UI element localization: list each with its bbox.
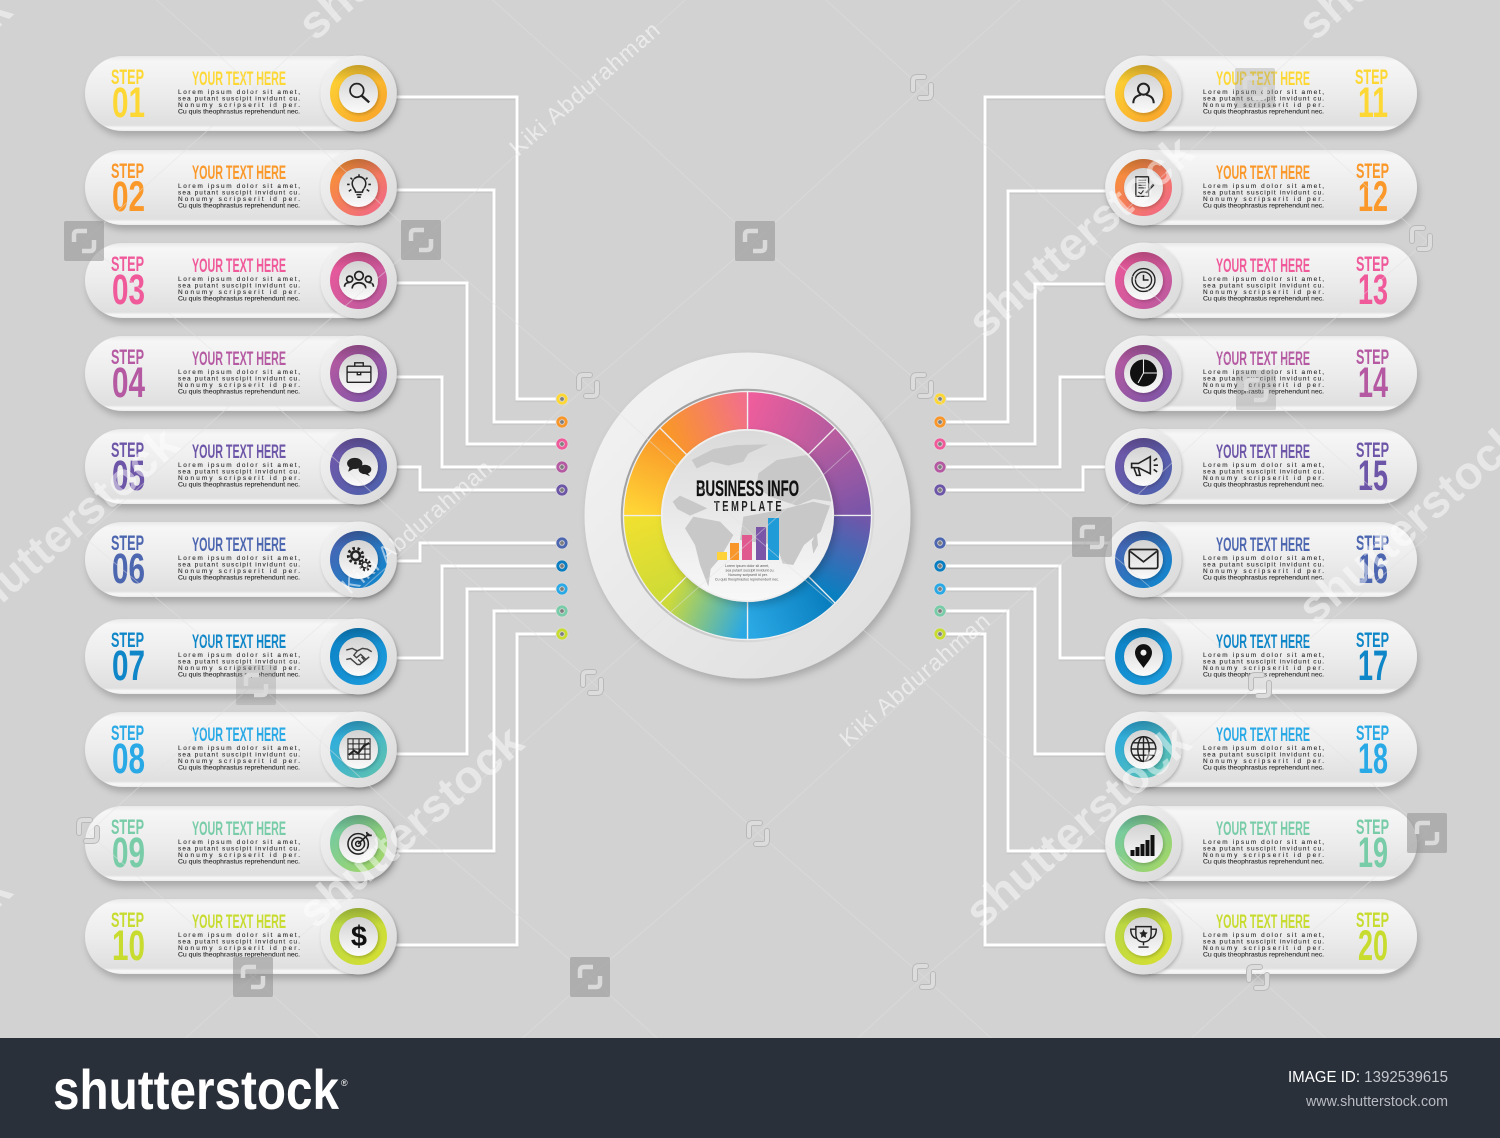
watermark: shutterstock text: shutterstock — [957, 124, 1203, 348]
step 01 body text: sea putant suscipit invidunt cu. — [178, 96, 300, 102]
central hub — [584, 352, 910, 678]
step 06 body text: sea putant suscipit invidunt cu. — [178, 562, 300, 568]
step 08 body text: Cu quis theophrastus reprehendunt nec. — [178, 764, 300, 772]
step 13 label: 13 — [1358, 266, 1388, 314]
step 10 card — [85, 898, 397, 974]
step 07 body text: Lorem ipsum dolor sit amet, — [178, 652, 300, 659]
icon: rising bars — [1130, 835, 1154, 856]
icon: megaphone — [1132, 457, 1158, 475]
icon: trophy — [1131, 927, 1156, 947]
step 17 label: STEP — [1356, 629, 1389, 652]
step 20 label — [1216, 909, 1389, 970]
step 08 label — [111, 722, 286, 783]
step 05 card — [85, 428, 397, 504]
step 14 body text — [1203, 369, 1324, 396]
step 05 label — [111, 439, 286, 500]
step 06 body text: Nonumy scripserit id per. — [178, 568, 300, 575]
watermark: author credit — [336, 16, 995, 752]
step 06 body text: Lorem ipsum dolor sit amet, — [178, 555, 300, 562]
step 20 body text — [1203, 932, 1324, 958]
step 13 body text: Cu quis theophrastus reprehendunt nec. — [1203, 296, 1324, 302]
step 17 body text: Nonumy scripserit id per. — [1203, 665, 1324, 672]
step 04 body text: Cu quis theophrastus reprehendunt nec. — [178, 388, 300, 396]
step 18 label — [1216, 722, 1389, 783]
step 11 body text: Cu quis theophrastus reprehendunt nec. — [1203, 108, 1324, 116]
step 18 body text: Lorem ipsum dolor sit amet, — [1203, 745, 1324, 752]
world map — [673, 444, 832, 587]
icon: envelope — [1129, 550, 1158, 568]
step 14 label: STEP — [1356, 346, 1389, 369]
step 17 body text — [1203, 652, 1324, 678]
step 02 label: STEP — [111, 160, 144, 183]
step 02 body text: sea putant suscipit invidunt cu. — [178, 190, 300, 196]
connector dots: right — [934, 393, 946, 640]
step 17 card — [1105, 618, 1417, 694]
step 12 body text: Cu quis theophrastus reprehendunt nec. — [1203, 202, 1324, 210]
hub inner disc — [662, 430, 833, 601]
watermark: author credit: Kiki Abdurahman — [834, 607, 995, 752]
step 02 body text: Cu quis theophrastus reprehendunt nec. — [178, 202, 300, 210]
step 09 card — [85, 806, 397, 882]
step 15 card — [1105, 428, 1417, 504]
step 15 label: STEP — [1356, 439, 1389, 462]
icon: map pin — [1135, 644, 1152, 668]
step 07 label: YOUR TEXT HERE — [192, 632, 286, 653]
step 19 body text — [1203, 839, 1324, 866]
step 15 label — [1216, 439, 1389, 500]
step 05 body text: Lorem ipsum dolor sit amet, — [178, 462, 300, 469]
step 12 label: STEP — [1356, 160, 1389, 183]
bar chart — [717, 518, 779, 560]
footer bar — [0, 1038, 1500, 1138]
step 14 label: YOUR TEXT HERE — [1216, 349, 1310, 370]
step 12 label — [1216, 160, 1389, 221]
hub recess edge — [622, 390, 873, 641]
step 10 label: YOUR TEXT HERE — [192, 912, 286, 933]
step 02 label — [111, 160, 286, 221]
step 16 body text: Lorem ipsum dolor sit amet, — [1203, 555, 1324, 562]
step 06 body text — [178, 555, 300, 582]
step 18 body text — [1203, 745, 1324, 772]
step 10 body text: Cu quis theophrastus reprehendunt nec. — [178, 952, 300, 958]
step 03 label — [111, 253, 286, 314]
icon: handshake — [346, 648, 372, 664]
step 17 body text: Lorem ipsum dolor sit amet, — [1203, 652, 1324, 659]
step 11 label: YOUR TEXT HERE — [1216, 69, 1310, 90]
step 14 body text: Cu quis theophrastus reprehendunt nec. — [1203, 388, 1324, 396]
step 03 label: YOUR TEXT HERE — [192, 256, 286, 277]
step 09 body text: Cu quis theophrastus reprehendunt nec. — [178, 858, 300, 866]
step 12 card — [1105, 150, 1417, 226]
step 09 body text — [178, 839, 300, 866]
step 12 body text: Nonumy scripserit id per. — [1203, 196, 1324, 203]
step 17 body text: sea putant suscipit invidunt cu. — [1203, 658, 1324, 666]
step 19 label — [1216, 816, 1389, 877]
step 01 body text: Lorem ipsum dolor sit amet, — [178, 89, 300, 96]
step 15 body text: Nonumy scripserit id per. — [1203, 475, 1324, 482]
step 01 label: STEP — [111, 66, 144, 89]
watermark: grey logo squares — [64, 68, 1447, 997]
step 12 body text — [1203, 183, 1324, 210]
step 19 label: YOUR TEXT HERE — [1216, 819, 1310, 840]
step 14 body text: sea putant suscipit invidunt cu. — [1203, 376, 1324, 382]
step 08 body text: sea putant suscipit invidunt cu. — [178, 752, 300, 758]
step 20 body text: Cu quis theophrastus reprehendunt nec. — [1203, 952, 1324, 958]
step 11 label: STEP — [1355, 66, 1388, 89]
step 20 label: 20 — [1358, 922, 1388, 970]
step 13 body text: sea putant suscipit invidunt cu. — [1203, 282, 1324, 290]
step 02 body text: Lorem ipsum dolor sit amet, — [178, 183, 300, 190]
step 13 body text: Nonumy scripserit id per. — [1203, 289, 1324, 296]
step 04 label: YOUR TEXT HERE — [192, 349, 286, 370]
step 20 card — [1105, 898, 1417, 974]
step 20 label: STEP — [1356, 909, 1389, 932]
hub small text: Lorem ipsum dolor sit amet, — [725, 564, 769, 568]
icon: briefcase — [347, 363, 371, 382]
hub small text: Nonumy scripserit id per. — [728, 573, 768, 577]
icon: clock — [1132, 269, 1155, 291]
step 15 body text: sea putant suscipit invidunt cu. — [1203, 468, 1324, 476]
step 03 card — [85, 242, 397, 318]
step 08 card — [85, 712, 397, 788]
icon: pie chart — [1130, 360, 1157, 386]
icon: magnifier — [350, 84, 369, 102]
step 08 label: 08 — [112, 735, 145, 783]
step 03 body text: sea putant suscipit invidunt cu. — [178, 282, 300, 290]
step 15 body text: Cu quis theophrastus reprehendunt nec. — [1203, 482, 1324, 488]
step 18 body text: Nonumy scripserit id per. — [1203, 758, 1324, 765]
step 11 card — [1105, 56, 1417, 132]
icon: gears — [348, 548, 370, 570]
step 04 body text: Lorem ipsum dolor sit amet, — [178, 369, 300, 376]
step 16 body text: Nonumy scripserit id per. — [1203, 568, 1324, 575]
step 10 body text: Lorem ipsum dolor sit amet, — [178, 932, 300, 939]
step 08 body text — [178, 745, 300, 772]
step 15 label: YOUR TEXT HERE — [1216, 442, 1310, 463]
step 09 label — [111, 816, 286, 877]
step 17 label — [1216, 629, 1389, 690]
step 06 card — [85, 522, 397, 598]
hub small text: Cu quis theophrastus reprehendunt nec. — [715, 578, 779, 582]
step 20 body text: Nonumy scripserit id per. — [1203, 945, 1324, 952]
step 11 body text — [1203, 89, 1324, 116]
step 20 body text: Lorem ipsum dolor sit amet, — [1203, 932, 1324, 939]
step 09 body text: Lorem ipsum dolor sit amet, — [178, 839, 300, 846]
connector dots: left — [556, 393, 568, 640]
watermark: logo marks — [79, 77, 1430, 988]
step 02 label: YOUR TEXT HERE — [192, 163, 286, 184]
step 11 body text: sea putant suscipit invidunt cu. — [1203, 96, 1324, 102]
step 11 body text: Nonumy scripserit id per. — [1203, 102, 1324, 109]
step 16 label: STEP — [1356, 532, 1389, 555]
icon: globe — [1131, 737, 1156, 761]
step 14 label — [1216, 346, 1389, 407]
step 14 body text: Lorem ipsum dolor sit amet, — [1203, 369, 1324, 376]
step 16 body text — [1203, 555, 1324, 582]
step 05 label: STEP — [111, 439, 144, 462]
step 20 label: YOUR TEXT HERE — [1216, 912, 1310, 933]
step 07 body text: Nonumy scripserit id per. — [178, 665, 300, 672]
step 13 card — [1105, 242, 1417, 318]
step 01 label: 01 — [112, 79, 145, 127]
step 01 body text: Cu quis theophrastus reprehendunt nec. — [178, 108, 300, 116]
watermark: author credit: Kiki Abdurahman — [336, 454, 497, 599]
step 11 label: 11 — [1358, 79, 1388, 127]
step 08 body text: Lorem ipsum dolor sit amet, — [178, 745, 300, 752]
step 12 label: YOUR TEXT HERE — [1216, 163, 1310, 184]
step 05 label: YOUR TEXT HERE — [192, 442, 286, 463]
step 07 body text: Cu quis theophrastus reprehendunt nec. — [178, 672, 300, 678]
step 03 body text: Cu quis theophrastus reprehendunt nec. — [178, 296, 300, 302]
step 04 body text — [178, 369, 300, 396]
step 09 body text: sea putant suscipit invidunt cu. — [178, 846, 300, 852]
step 19 label: 19 — [1358, 829, 1388, 877]
step 01 body text: Nonumy scripserit id per. — [178, 102, 300, 109]
step 10 label — [111, 909, 286, 970]
step 03 body text: Lorem ipsum dolor sit amet, — [178, 276, 300, 283]
icon: document with pen — [1136, 177, 1154, 196]
watermark: shutterstock text: shutterstock — [287, 714, 533, 938]
step 20 body text: sea putant suscipit invidunt cu. — [1203, 938, 1324, 946]
step 04 label: 04 — [112, 359, 145, 407]
icon: user — [1133, 84, 1154, 103]
step 03 body text — [178, 276, 300, 302]
step 01 body text — [178, 89, 300, 116]
step 19 body text: Lorem ipsum dolor sit amet, — [1203, 839, 1324, 846]
step 19 card — [1105, 806, 1417, 882]
step 07 label — [111, 629, 286, 690]
step 06 label: STEP — [111, 532, 144, 555]
step 10 label: 10 — [112, 922, 145, 970]
step 16 label — [1216, 532, 1389, 593]
hub subtitle: TEMPLATE — [714, 498, 784, 515]
step 10 body text — [178, 932, 300, 958]
step 10 body text: Nonumy scripserit id per. — [178, 945, 300, 952]
step 12 label: 12 — [1358, 173, 1388, 221]
step 14 label: 14 — [1358, 359, 1388, 407]
icon: target — [348, 832, 372, 854]
watermark: shutterstock text: shutterstock — [954, 714, 1200, 938]
connector lines: left — [392, 97, 562, 945]
step 19 body text: sea putant suscipit invidunt cu. — [1203, 846, 1324, 852]
step 07 card — [85, 618, 397, 694]
step 14 card — [1105, 336, 1417, 412]
step 13 body text: Lorem ipsum dolor sit amet, — [1203, 276, 1324, 283]
step 07 label: 07 — [112, 642, 145, 690]
step 07 body text — [178, 652, 300, 678]
step 09 label: STEP — [111, 816, 144, 839]
step 11 label — [1216, 66, 1388, 127]
step 11 body text: Lorem ipsum dolor sit amet, — [1203, 89, 1324, 96]
step 16 body text: sea putant suscipit invidunt cu. — [1203, 562, 1324, 568]
step 19 body text: Cu quis theophrastus reprehendunt nec. — [1203, 858, 1324, 866]
step 12 body text: Lorem ipsum dolor sit amet, — [1203, 183, 1324, 190]
step 01 card — [85, 56, 397, 132]
step 04 body text: Nonumy scripserit id per. — [178, 382, 300, 389]
step 16 body text: Cu quis theophrastus reprehendunt nec. — [1203, 574, 1324, 582]
step 02 label: 02 — [112, 173, 145, 221]
step 06 label: YOUR TEXT HERE — [192, 535, 286, 556]
step 07 body text: sea putant suscipit invidunt cu. — [178, 658, 300, 666]
step 18 body text: Cu quis theophrastus reprehendunt nec. — [1203, 764, 1324, 772]
watermark: author credit: Kiki Abdurahman — [504, 16, 665, 161]
icon: dollar: $ — [351, 921, 367, 953]
step 04 card — [85, 336, 397, 412]
icon: chart grid — [348, 739, 370, 759]
step 06 label — [111, 532, 286, 593]
step 13 body text — [1203, 276, 1324, 302]
step 16 card — [1105, 522, 1417, 598]
step 06 label: 06 — [112, 545, 145, 593]
step 05 body text — [178, 462, 300, 488]
step 15 body text: Lorem ipsum dolor sit amet, — [1203, 462, 1324, 469]
hub small text — [715, 564, 779, 582]
step 01 label: YOUR TEXT HERE — [192, 69, 286, 90]
step 19 body text: Nonumy scripserit id per. — [1203, 852, 1324, 859]
step 17 label: YOUR TEXT HERE — [1216, 632, 1310, 653]
step 16 label: 16 — [1358, 545, 1388, 593]
step 14 body text: Nonumy scripserit id per. — [1203, 382, 1324, 389]
step 03 label: 03 — [112, 266, 145, 314]
step 04 body text: sea putant suscipit invidunt cu. — [178, 376, 300, 382]
step 18 label: STEP — [1356, 722, 1389, 745]
step 18 label: YOUR TEXT HERE — [1216, 725, 1310, 746]
icon: chat bubbles — [347, 458, 371, 476]
icon: team — [345, 272, 373, 288]
step 15 label: 15 — [1358, 452, 1388, 500]
footer registered mark: ® — [341, 1078, 348, 1088]
step 12 body text: sea putant suscipit invidunt cu. — [1203, 190, 1324, 196]
step 04 label: STEP — [111, 346, 144, 369]
step 03 body text: Nonumy scripserit id per. — [178, 289, 300, 296]
step 18 label: 18 — [1358, 735, 1388, 783]
step 17 body text: Cu quis theophrastus reprehendunt nec. — [1203, 672, 1324, 678]
step 04 label — [111, 346, 286, 407]
step 02 card — [85, 150, 397, 226]
step 05 body text: Cu quis theophrastus reprehendunt nec. — [178, 482, 300, 488]
step 13 label: YOUR TEXT HERE — [1216, 256, 1310, 277]
step 15 body text — [1203, 462, 1324, 488]
step 07 label: STEP — [111, 629, 144, 652]
step 09 label: 09 — [112, 829, 145, 877]
step 05 body text: Nonumy scripserit id per. — [178, 475, 300, 482]
step 17 label: 17 — [1358, 642, 1388, 690]
step 01 label — [111, 66, 286, 127]
connector lines: right — [940, 97, 1110, 945]
step 09 body text: Nonumy scripserit id per. — [178, 852, 300, 859]
step 13 label: STEP — [1356, 253, 1389, 276]
step 02 body text — [178, 183, 300, 210]
footer logo: shutterstock — [53, 1058, 340, 1121]
step 02 body text: Nonumy scripserit id per. — [178, 196, 300, 203]
step 10 label: STEP — [111, 909, 144, 932]
step 05 label: 05 — [112, 452, 145, 500]
step 08 label: YOUR TEXT HERE — [192, 725, 286, 746]
step 08 body text: Nonumy scripserit id per. — [178, 758, 300, 765]
colour ring segments — [624, 392, 872, 640]
footer image id: IMAGE ID: 1392539615 — [1288, 1069, 1448, 1086]
step 19 label: STEP — [1356, 816, 1389, 839]
step 18 card — [1105, 712, 1417, 788]
step 05 body text: sea putant suscipit invidunt cu. — [178, 468, 300, 476]
hub title: BUSINESS INFO — [696, 476, 799, 501]
step 10 body text: sea putant suscipit invidunt cu. — [178, 938, 300, 946]
step 03 label: STEP — [111, 253, 144, 276]
hub small text: sea putant suscipit invidunt cu. — [726, 568, 774, 572]
step 06 body text: Cu quis theophrastus reprehendunt nec. — [178, 574, 300, 582]
footer url: www.shutterstock.com — [1305, 1094, 1448, 1110]
step 08 label: STEP — [111, 722, 144, 745]
step 18 body text: sea putant suscipit invidunt cu. — [1203, 752, 1324, 758]
hub outer plate — [584, 352, 910, 678]
step 09 label: YOUR TEXT HERE — [192, 819, 286, 840]
step 13 label — [1216, 253, 1389, 314]
icon: light bulb — [347, 174, 371, 197]
step 16 label: YOUR TEXT HERE — [1216, 535, 1310, 556]
